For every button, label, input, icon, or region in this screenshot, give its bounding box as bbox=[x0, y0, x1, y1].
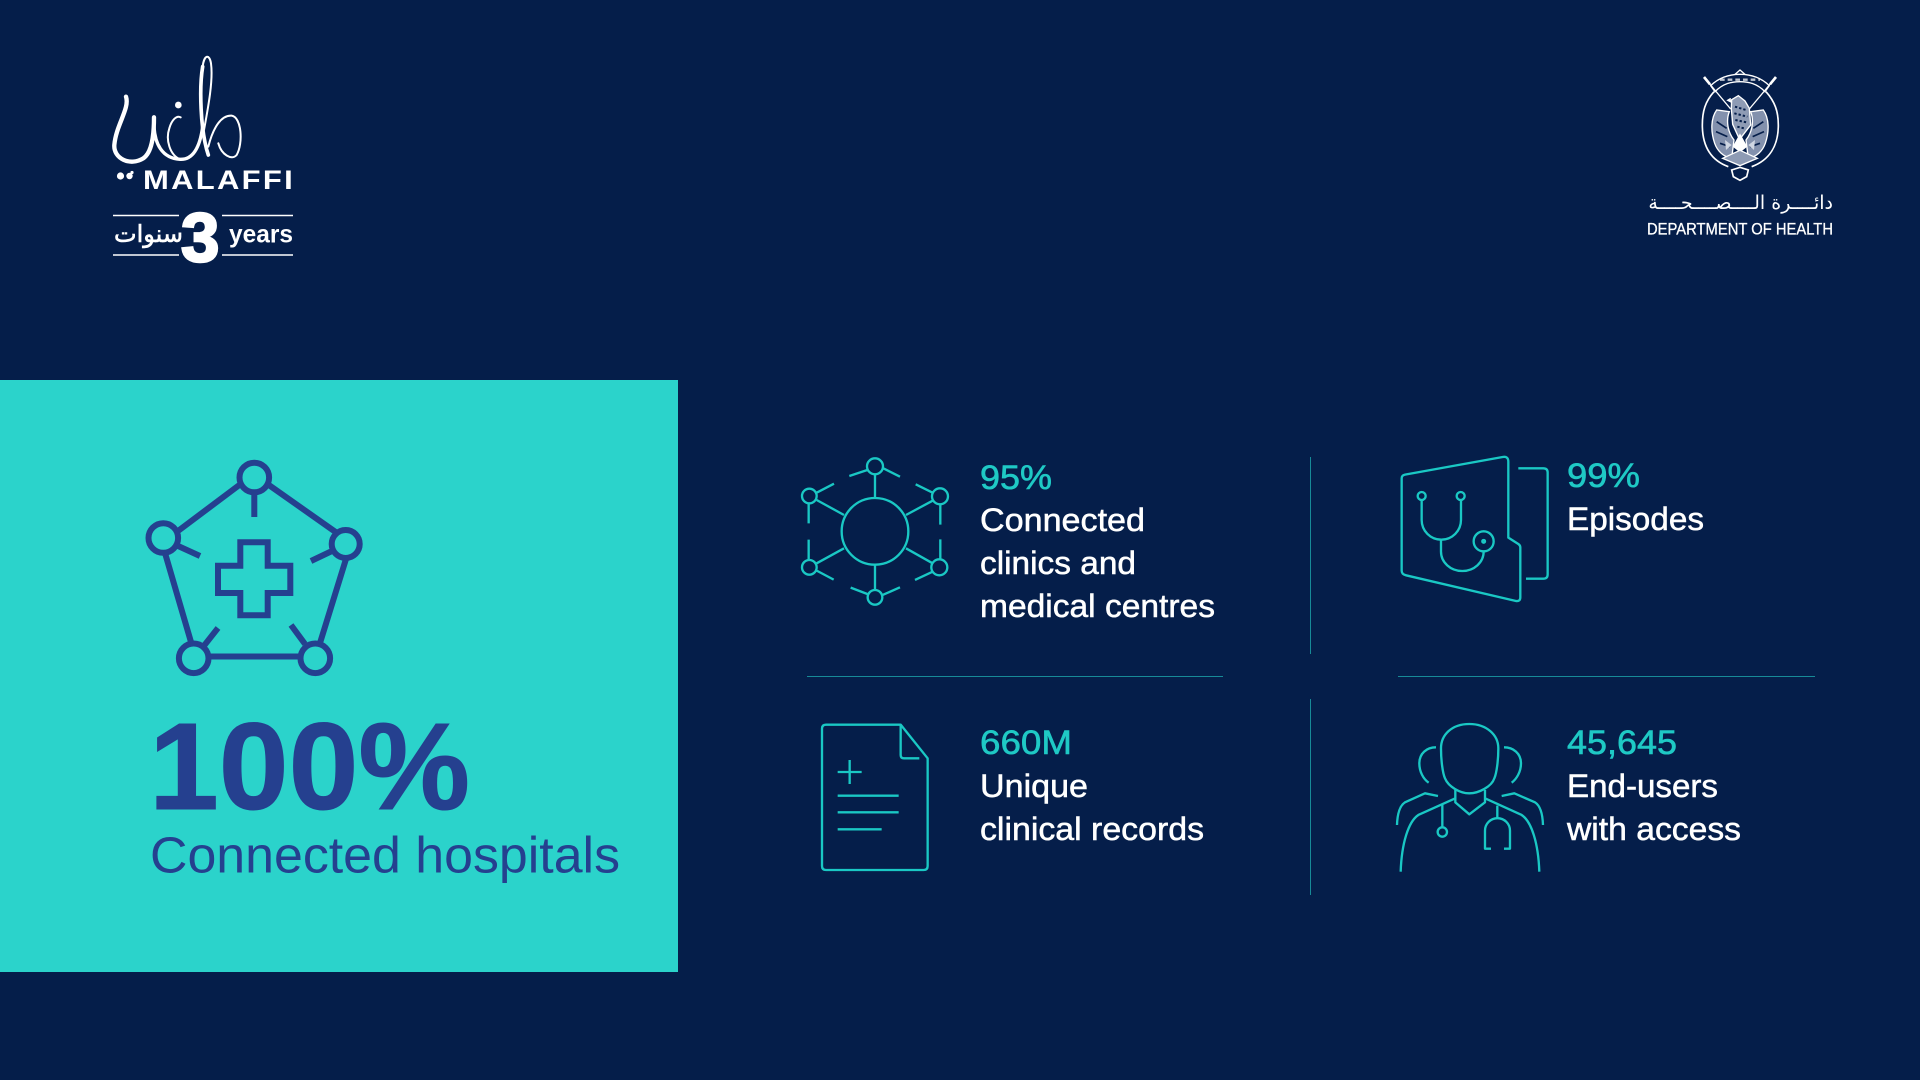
stat: 100%: 100% bbox=[149, 699, 470, 836]
value: 95%: 95% bbox=[980, 459, 1052, 497]
icon: hub network bbox=[802, 458, 948, 605]
label: Connected clinics and medical centres bbox=[980, 502, 1215, 624]
label: Unique clinical records: Unique bbox=[980, 768, 1088, 804]
stat block: end-users bbox=[1397, 724, 1741, 872]
icon: doctors group bbox=[1397, 724, 1543, 872]
English department name: DEPARTMENT OF HEALTH bbox=[1647, 220, 1833, 238]
Arabic department name text: دائــــرة الــــصــــحــــة bbox=[1648, 192, 1833, 214]
logo dots bbox=[117, 171, 134, 180]
emblem: Abu Dhabi falcon bbox=[1702, 70, 1778, 180]
logo: Malaffi calligraphic mark bbox=[114, 57, 241, 162]
panel: connected hospitals bbox=[0, 380, 678, 972]
value: 99%: 99% bbox=[1567, 457, 1640, 495]
stat block: clinics bbox=[802, 458, 1215, 624]
label: End-users with access bbox=[1566, 768, 1741, 847]
value: 660M: 660M bbox=[980, 724, 1072, 762]
years label: years bbox=[229, 220, 293, 248]
label: End-users with access: End-users bbox=[1567, 768, 1718, 804]
icon: hospital network pentagon bbox=[148, 463, 360, 673]
icon: folder with stethoscope bbox=[1402, 457, 1548, 601]
stat block: episodes bbox=[1402, 457, 1704, 601]
Arabic years label: سنوات bbox=[114, 220, 183, 248]
panel background bbox=[0, 380, 678, 972]
anniversary numeral: 3 bbox=[181, 199, 219, 276]
grid dividers bbox=[807, 457, 1815, 895]
label: Unique clinical records bbox=[980, 768, 1204, 847]
value: 45,645: 45,645 bbox=[1567, 724, 1677, 762]
label: End-users with access: with access bbox=[1566, 811, 1741, 847]
label: Connected hospitals: Connected hospitals bbox=[150, 826, 620, 884]
logo: Department of Health bbox=[1647, 70, 1833, 238]
label: Connected clinics and medical centres: clinics and bbox=[980, 545, 1136, 581]
rules around the anniversary mark bbox=[113, 216, 293, 255]
label: Episodes: Episodes bbox=[1567, 501, 1704, 537]
icon: medical document bbox=[822, 725, 928, 870]
label: Unique clinical records: clinical records bbox=[980, 811, 1204, 847]
wordmark: MALAFFI: MALAFFI bbox=[143, 165, 295, 195]
label: Connected clinics and medical centres: Connected bbox=[980, 502, 1145, 538]
logo: Malaffi 3 years bbox=[113, 57, 295, 276]
stat block: clinical records bbox=[822, 724, 1204, 870]
label: Connected clinics and medical centres: medical centres bbox=[980, 588, 1215, 624]
